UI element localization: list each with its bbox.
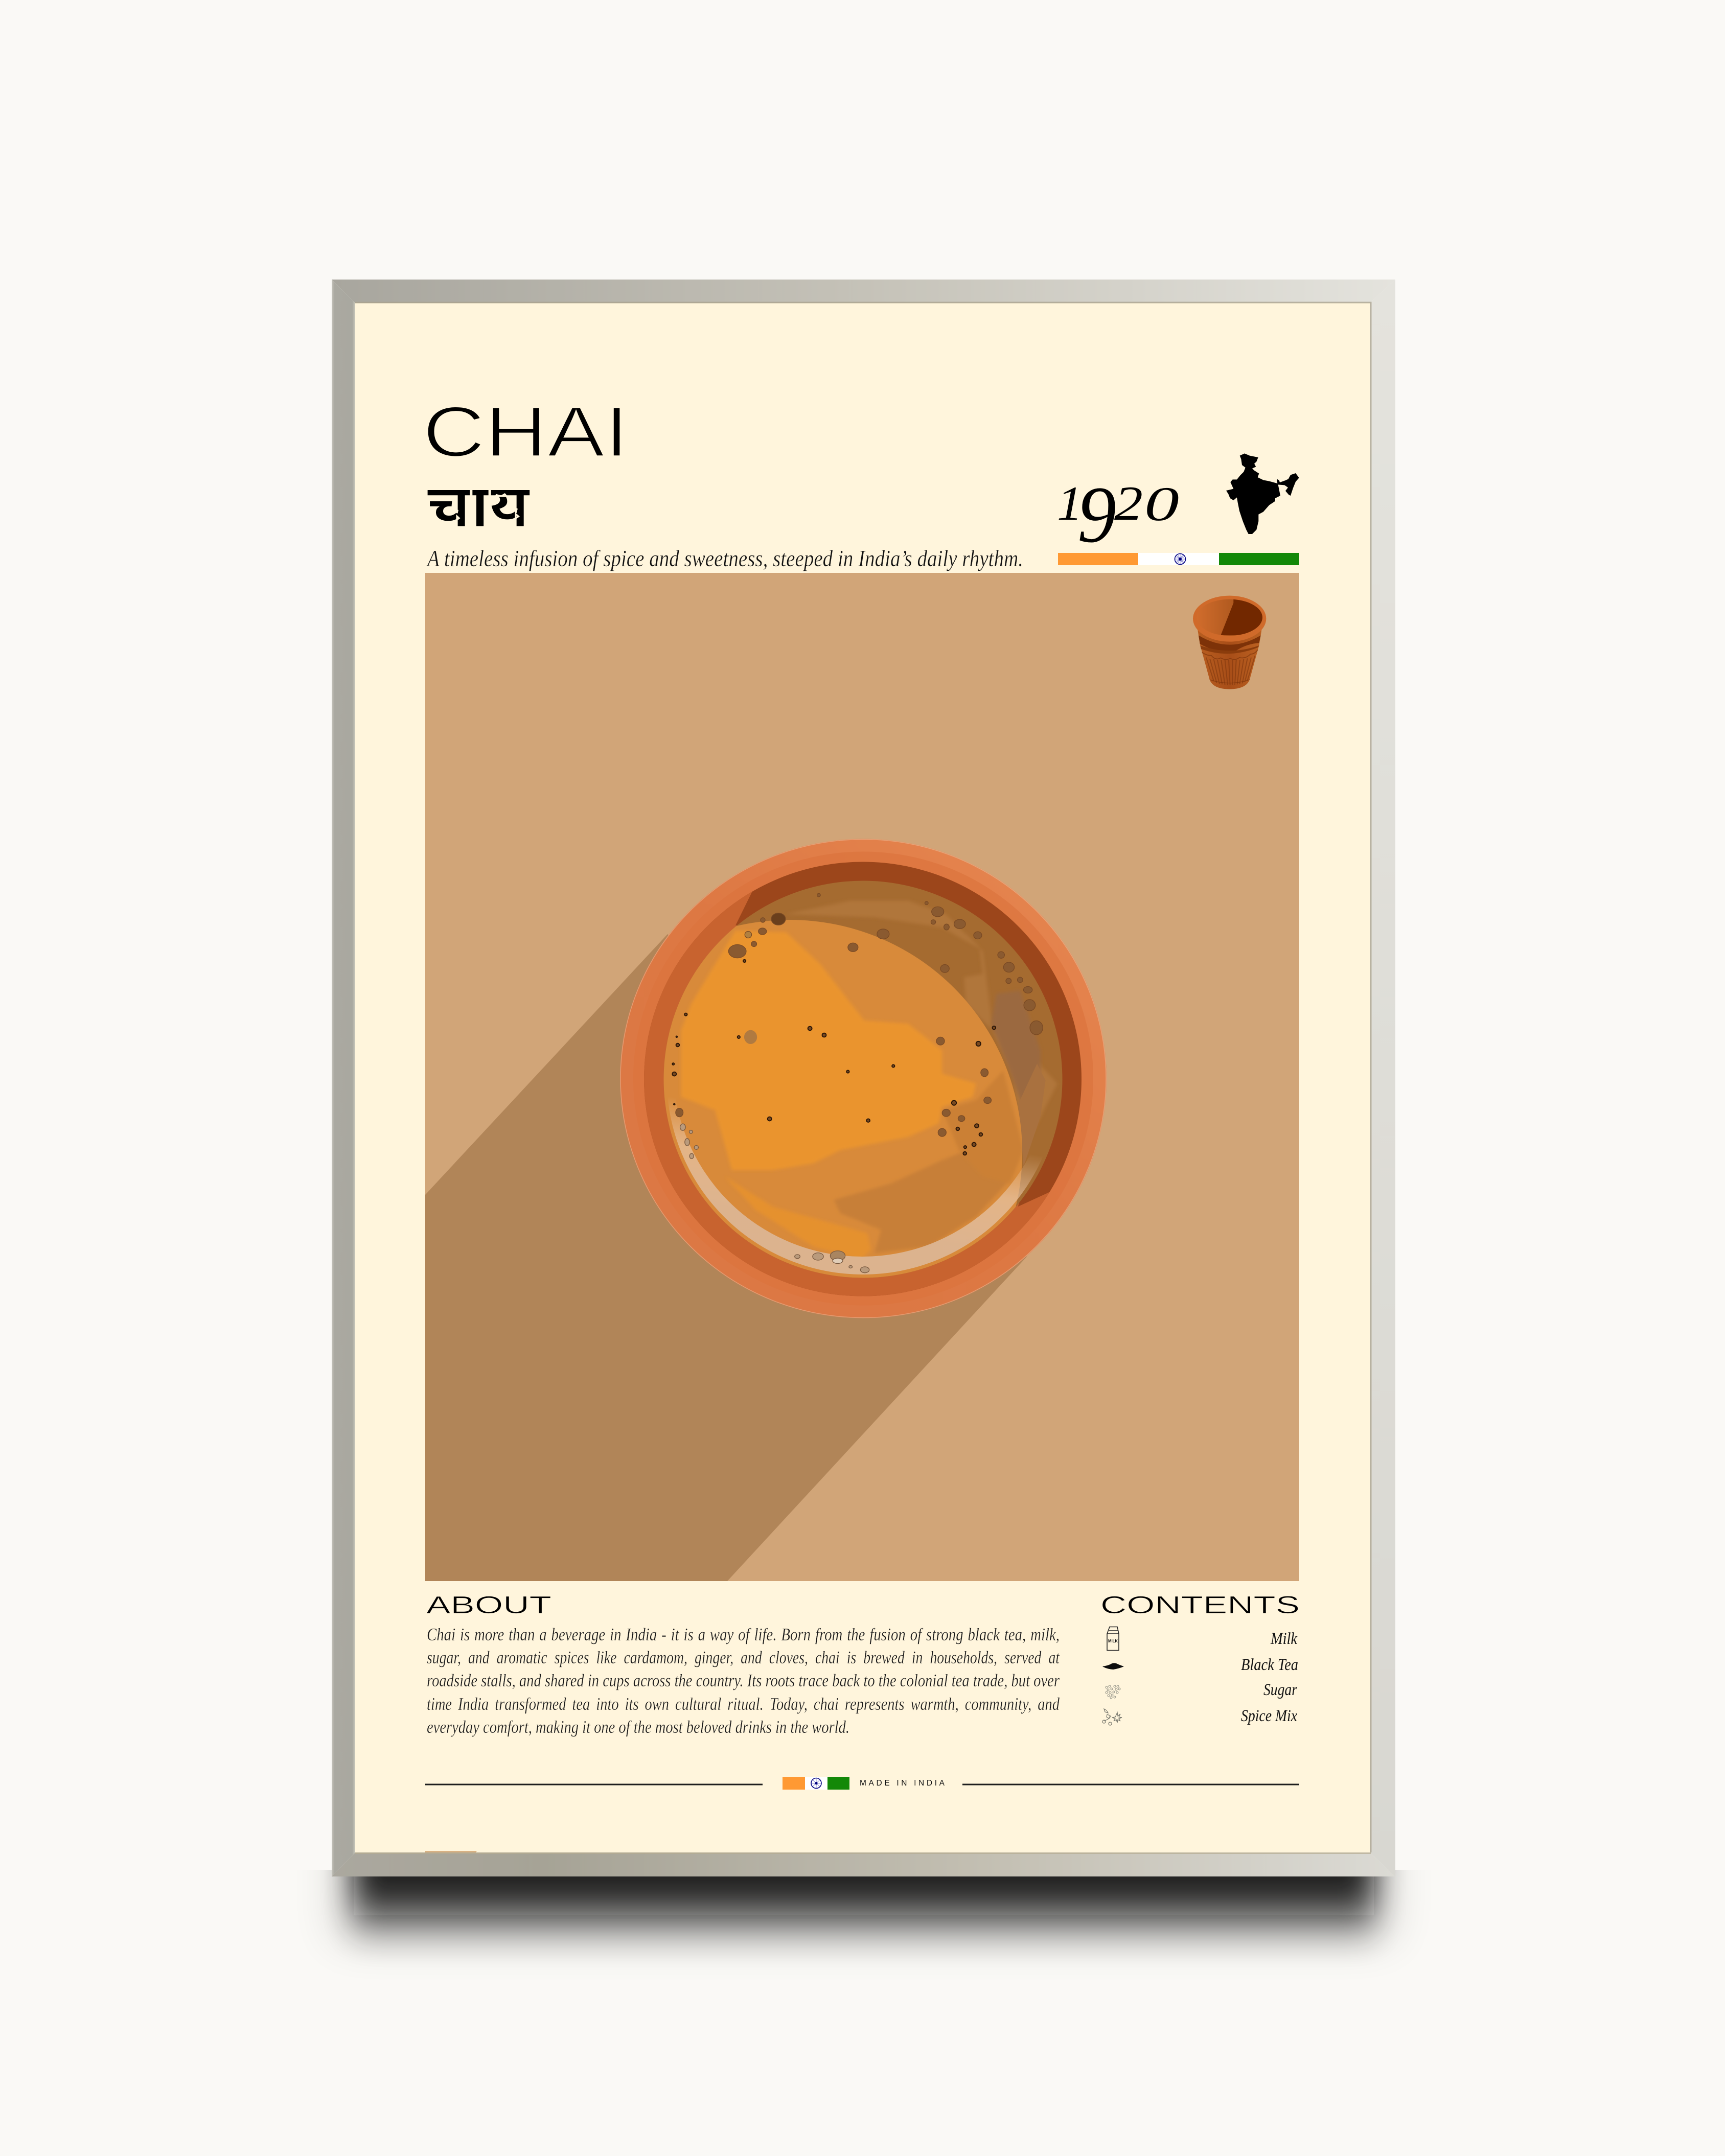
bubbles xyxy=(676,893,1043,1137)
contents list xyxy=(1102,1627,1298,1725)
label: sugar: Sugar xyxy=(1263,1681,1297,1699)
title: CHAI: CHAI xyxy=(423,391,629,472)
about body text: Chai is more than a beverage in India - it is a way of life. Born from the fusion of strong black tea, milk, xyxy=(427,1625,1060,1644)
year 1920: 2 xyxy=(1114,476,1143,530)
bowl inner wall xyxy=(644,862,1082,1296)
heading: contents: CONTENTS xyxy=(1100,1592,1300,1619)
about body text xyxy=(427,1625,1060,1737)
icon: clay cup xyxy=(1193,596,1269,689)
heading: about: ABOUT xyxy=(426,1592,551,1619)
hero panel xyxy=(425,573,1299,1581)
icon: black tea pile xyxy=(1102,1663,1124,1670)
poster mockup scene xyxy=(320,280,1408,1962)
poster sheet xyxy=(355,303,1370,1852)
chai bowl, top view xyxy=(620,839,1107,1318)
year 1920: 1 xyxy=(1057,476,1083,530)
icon: sugar xyxy=(1106,1685,1120,1699)
about body text: everyday comfort, making it one of the most beloved drinks in the world. xyxy=(427,1717,849,1737)
wall shadow beneath frame xyxy=(320,1870,1408,1962)
tea surface xyxy=(663,881,1062,1278)
icon: spice mix xyxy=(1102,1709,1122,1725)
icon: milk carton xyxy=(1107,1627,1119,1651)
tagline: A timeless infusion of spice and sweetness, steeped in India’s daily rhythm. xyxy=(426,545,1023,571)
frame xyxy=(332,280,1395,1876)
about body text: sugar, and aromatic spices like cardamom, ginger, and cloves, chai is brewed in households, served at xyxy=(427,1648,1060,1667)
about body text: roadside stalls, and shared in cups across the country. Its roots trace back to the colonial tea trade, but over xyxy=(427,1671,1060,1690)
bowl cast shadow xyxy=(425,934,1027,1581)
lit tea area xyxy=(613,869,1124,1329)
icon: milk carton: MILK xyxy=(1108,1638,1118,1643)
icon: map of India xyxy=(1226,453,1299,534)
surface reflection xyxy=(666,882,1059,1274)
panel edge sliver at poster bottom xyxy=(425,1851,477,1852)
footer: made in India: MADE IN INDIA xyxy=(860,1779,945,1788)
flag bar xyxy=(1058,553,1299,565)
title: Hindi: चाय xyxy=(427,473,531,552)
year 1920 xyxy=(1057,470,1179,560)
label: black tea: Black Tea xyxy=(1241,1656,1298,1674)
footer: made in India xyxy=(425,1777,1299,1790)
year 1920: 9 xyxy=(1077,470,1116,560)
label: spice mix: Spice Mix xyxy=(1241,1707,1297,1725)
year 1920: 0 xyxy=(1144,477,1179,531)
about body text: time India transformed tea into its own cultural ritual. Today, chai represents warmth, community, and xyxy=(427,1694,1060,1714)
label: milk: Milk xyxy=(1270,1630,1298,1648)
